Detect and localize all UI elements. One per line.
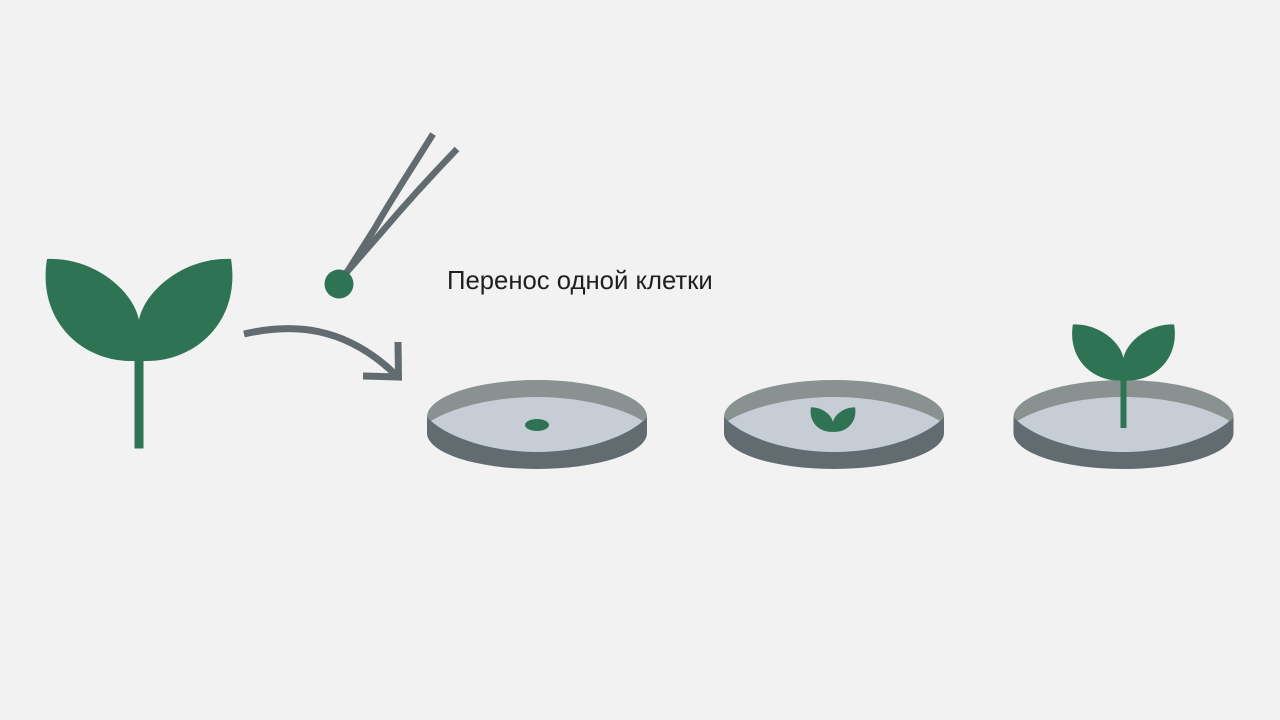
arrow	[244, 329, 398, 377]
large sprout	[46, 259, 232, 448]
dish 3 with grown sprout	[1014, 324, 1234, 469]
icon: tweezers holding a cell	[324, 134, 457, 298]
caption: Перенос одной клетки	[447, 267, 713, 295]
dish 1 with cell	[427, 380, 647, 469]
dish 2 with small sprout	[724, 380, 944, 469]
